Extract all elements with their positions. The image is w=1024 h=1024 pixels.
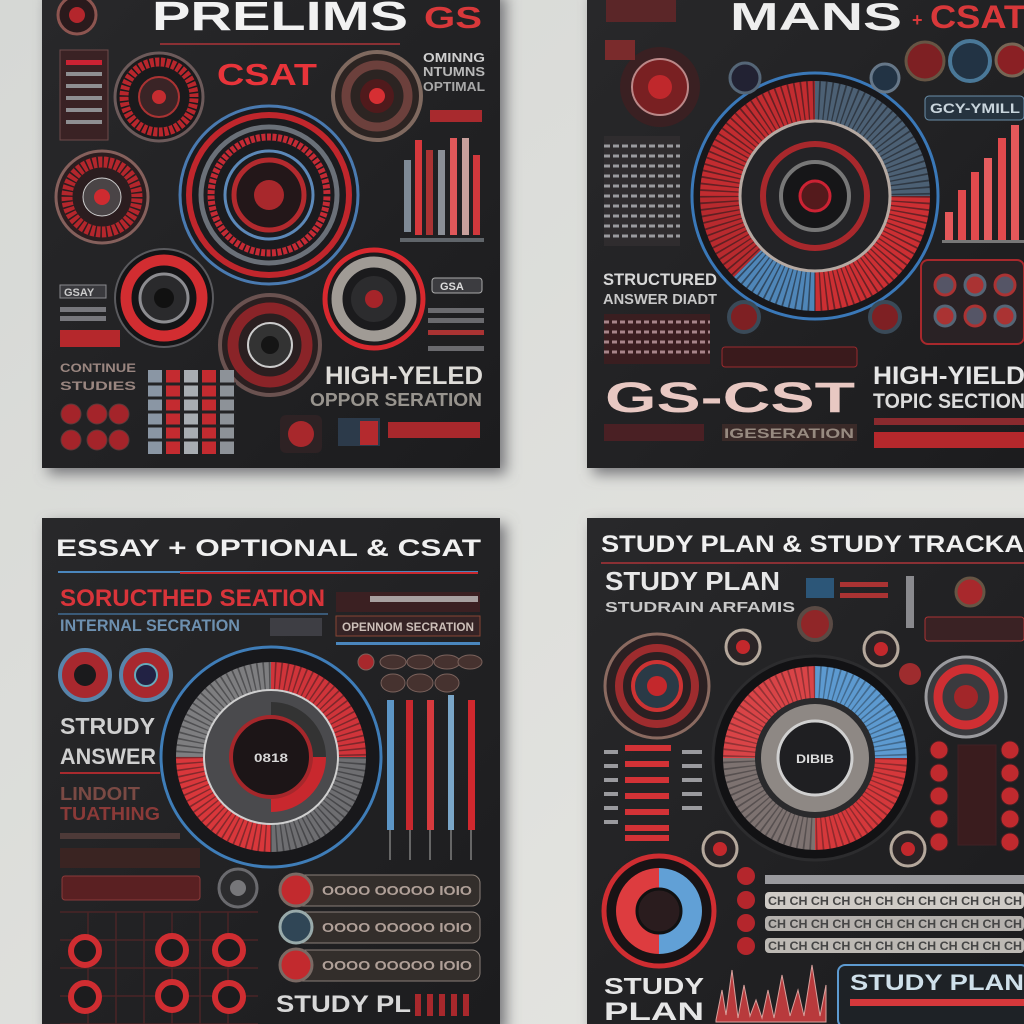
subheading: INTERNAL SECRATION [60,616,240,635]
left labels: GSAY [64,287,95,299]
bar label [722,347,857,367]
text block: top right: NTUMNS [423,64,485,79]
heading: csat: CSAT [217,57,317,92]
dial: central mains [692,73,938,319]
grid of red rings [60,912,258,1024]
small labels right [428,278,484,351]
table: left mains [604,136,680,246]
footer bars: IGESERATION [724,425,854,441]
dial: lower right [325,250,423,348]
heading: study answer [60,713,160,774]
knob [219,869,257,907]
heading: high-yield: OPPOR SERATION [310,390,482,410]
bars: left stack [625,745,671,841]
knobs [703,608,925,866]
left labels [60,285,136,393]
text block: left lower: TUATHING [60,804,160,824]
label pill [925,96,1024,120]
dials: pair [60,650,171,700]
heading: study answer: STRUDY [60,713,155,739]
small labels right: GSA [440,281,464,293]
title: mains: + [912,10,923,30]
dial: central plan: DIBIB [796,752,834,766]
heading: study plan lower [604,973,704,1024]
title: mains [730,0,1024,39]
footer labels [338,418,480,446]
bar chart: prelims [400,138,484,242]
icons: small red knobs [61,404,129,450]
label pill: GCY-YMILL [930,100,1021,116]
dial: right plan [926,657,1006,737]
top right icons [358,654,482,692]
dial: central [180,106,358,284]
list rows: OOOO OOOOO IOIO [322,958,472,973]
heading: high-yield topic [873,362,1024,413]
footer bars [604,418,1024,448]
subheading [58,613,328,636]
left info block [60,50,108,140]
dial: central essay [161,647,381,867]
tracker rows [765,875,1024,953]
list rows [280,874,480,981]
dial: upper left [115,53,203,141]
top mid chips [806,576,1024,641]
left labels: STUDIES [60,379,136,393]
text block: right header: OPENNOM SECRATION [342,620,474,634]
dial: lower left [115,249,213,347]
red knob grid [930,741,1019,851]
title: prelims: GS [424,0,482,35]
title: study plan and tracker: STUDY PLAN & STUDY TRACKA [601,531,1024,558]
dial: left [56,151,148,243]
heading: structured answer: ANSWER DIADT [603,291,717,308]
heading: high-yield: HIGH-YELED [325,362,483,390]
panel grid right [921,260,1024,344]
bar: left [62,876,200,900]
dial: central plan [713,656,917,860]
dial: central essay: 0818 [254,751,288,765]
bar chart: mains [942,125,1024,243]
sliders [387,695,475,860]
dial: upper left mains [620,47,700,127]
text block: right header [336,592,480,645]
left labels: CONTINUE [60,361,136,375]
panel: mains [587,0,1024,474]
heading: study plan [601,562,1024,616]
title: mains: CSAT [930,0,1024,35]
panel: essay [42,518,506,1024]
list rows: OOOO OOOOO IOIO [322,920,472,935]
heading: study plan essay: STUDY PL [276,991,411,1018]
list rows: OOOO OOOOO IOIO [322,883,472,898]
knobs: top row [729,41,1024,332]
text block: left lower [60,784,200,868]
heading: study plan: STUDRAIN ARFAMIS [605,599,795,616]
grid: colored tiles [146,370,236,454]
text block: top right: OPTIMAL [423,79,485,94]
dial: bottom [220,295,320,395]
heading: structured answer [603,270,717,308]
title: essay: ESSAY + OPTIONAL & CSAT [56,535,481,562]
heading: study plan essay [276,991,466,1018]
tracker rows: CH CH CH CH CH CH CH CH CH CH CH CH [768,939,1022,953]
icon: top corner dial [58,0,96,34]
tracker rows: CH CH CH CH CH CH CH CH CH CH CH CH [768,917,1022,931]
text block: top right [423,50,485,122]
heading: study plan: STUDY PLAN [605,566,780,596]
icon: bottom knob [280,415,322,453]
ticks: left columns [604,750,702,824]
dial: upper right [333,52,421,140]
heading: high-yield topic: HIGH-YIELD [873,362,1024,390]
panel: prelims [42,0,506,474]
heading: structured section: SORUCTHED SEATION [60,585,325,612]
dial: upper left plan [605,634,709,738]
spike chart [716,965,826,1022]
heading: study answer: ANSWER [60,744,156,769]
text block: left lower: LINDOIT [60,784,140,804]
rule [58,571,478,574]
card: study plan [838,965,1024,1024]
text block: top right: OMINNG [423,50,485,65]
header chips [605,0,676,60]
card: study plan: STUDY PLAN [850,970,1024,995]
dial: donut lower left [604,856,714,966]
heading: structured answer: STRUCTURED [603,270,717,289]
title: prelims [152,0,482,45]
table: lower left mains [604,314,710,364]
heading: study plan lower: STUDY [604,973,704,999]
small red dots [737,867,755,955]
heading: gs-cst: GS-CST [605,374,855,422]
heading: high-yield [310,362,483,410]
tracker rows: CH CH CH CH CH CH CH CH CH CH CH CH [768,894,1022,908]
panel: study plan [587,518,1024,1024]
